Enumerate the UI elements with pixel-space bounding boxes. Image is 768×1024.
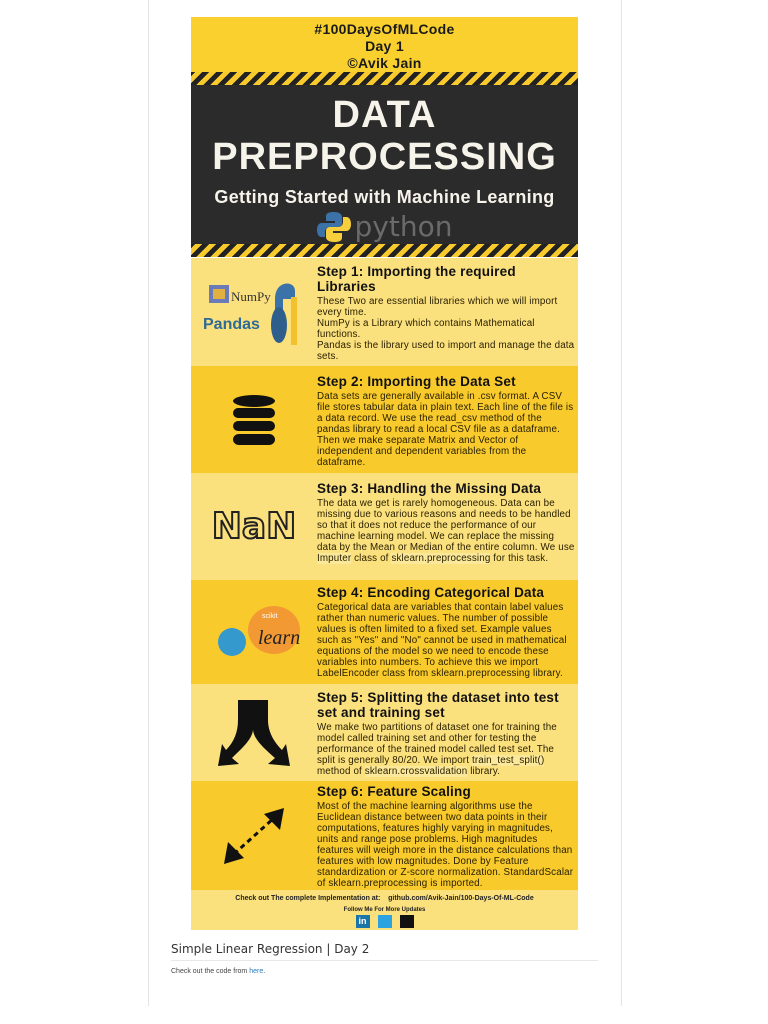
python logo: python	[355, 210, 452, 243]
panel: step 4: Step 4: Encoding Categorical Data	[317, 585, 544, 600]
panel: step 1: Step 1: Importing the required Libraries	[317, 264, 516, 294]
icon: scaling arrow	[224, 808, 284, 864]
title block	[191, 85, 578, 244]
header: hashtag and author: #100DaysOfMLCode	[314, 21, 455, 37]
icon: split arrows	[218, 700, 290, 766]
panel: step 6: Most of the machine learning algorithms use the Euclidean distance between two data points in their computations, features highly varying in magnitudes, units and range pose problems. High magnitudes features will weigh more in the distance calculations than features with low magnitudes. Done by Feature standardization or Z-score normalization. StandardScalar of sklearn.preprocessing is imported.	[317, 801, 573, 889]
header: hashtag and author: Day 1	[365, 38, 404, 54]
panel: step 6: Step 6: Feature Scaling	[317, 784, 471, 799]
title: DATA	[333, 94, 436, 136]
icon: scikit-learn: scikit	[262, 613, 278, 620]
social icons: in	[358, 916, 366, 926]
panel: step 1: NumPy is a Library which contains Mathematical functions.	[317, 318, 535, 340]
subtitle: Getting Started with Machine Learning	[214, 187, 555, 207]
link text: Check out the code from here.	[171, 968, 265, 975]
icon: scikit-learn	[218, 606, 300, 656]
panel: step 4	[191, 580, 578, 684]
header: hashtag and author	[191, 17, 578, 73]
panel: step 2: Step 2: Importing the Data Set	[317, 374, 516, 389]
infographic	[191, 17, 578, 930]
panel: step 3: The data we get is rarely homogeneous. Data can be missing due to various reasons and needs to be handled so that it does not reduce the performance of our machine learning model. We can replace the missing data by the Mean or Median of the entire column. We use Imputer class of sklearn.preprocessing for this task.	[317, 498, 574, 564]
panel: step 3: Step 3: Handling the Missing Data	[317, 481, 541, 496]
panel: step 1	[191, 258, 578, 366]
icon: NaN: NaN	[212, 506, 296, 547]
panel: step 3	[191, 473, 578, 580]
panel: step 4: Categorical data are variables that contain label values rather than numeric values. The number of possible values is often limited to a fixed set. Example values such as "Yes" and "No" cannot be used in mathematical equations of the model so we need to encode these variables into numbers. To achieve this we import LabelEncoder class from sklearn.preprocessing library.	[317, 602, 567, 679]
panel: step 1: Pandas is the library used to import and manage the data sets.	[317, 340, 574, 362]
icon: numpy pandas	[203, 284, 297, 345]
title: PREPROCESSING	[212, 136, 557, 178]
social icons	[356, 915, 414, 928]
panel: step 1: These Two are essential libraries which we will import every time.	[317, 296, 557, 318]
icon: database	[233, 395, 275, 445]
panel: step 2	[191, 366, 578, 473]
icon: numpy pandas: Pandas	[203, 316, 260, 333]
header: hashtag and author: ©Avik Jain	[347, 55, 422, 71]
panel: step 2: Data sets are generally available in .csv format. A CSV file stores tabular data in plain text. Each line of the file is a data record. We use the read_csv method of the pandas library to read a local CSV file as a dataframe. Then we make separate Matrix and Vector of independent and dependent variables from the dataframe.	[317, 391, 573, 468]
icon: scikit-learn: learn	[258, 627, 300, 649]
panel: step 6	[191, 781, 578, 890]
icon: numpy pandas: NumPy	[231, 289, 271, 304]
footer: Follow Me For More Updates	[344, 907, 425, 913]
footer link: Check out The complete Implementation at: github.com/Avik-Jain/100-Days-Of-ML-Code	[235, 895, 534, 902]
panel: step 5: Step 5: Splitting the dataset into test set and training set	[317, 690, 559, 720]
next post heading: Simple Linear Regression | Day 2	[171, 942, 369, 956]
title	[212, 94, 557, 178]
footer	[191, 890, 578, 930]
panel: step 5	[191, 684, 578, 781]
panel: step 5: We make two partitions of dataset one for training the model called training set and other for testing the performance of the trained model called test set. The split is generally 80/20. We import train_test_split() method of sklearn.crossvalidation library.	[317, 722, 557, 777]
